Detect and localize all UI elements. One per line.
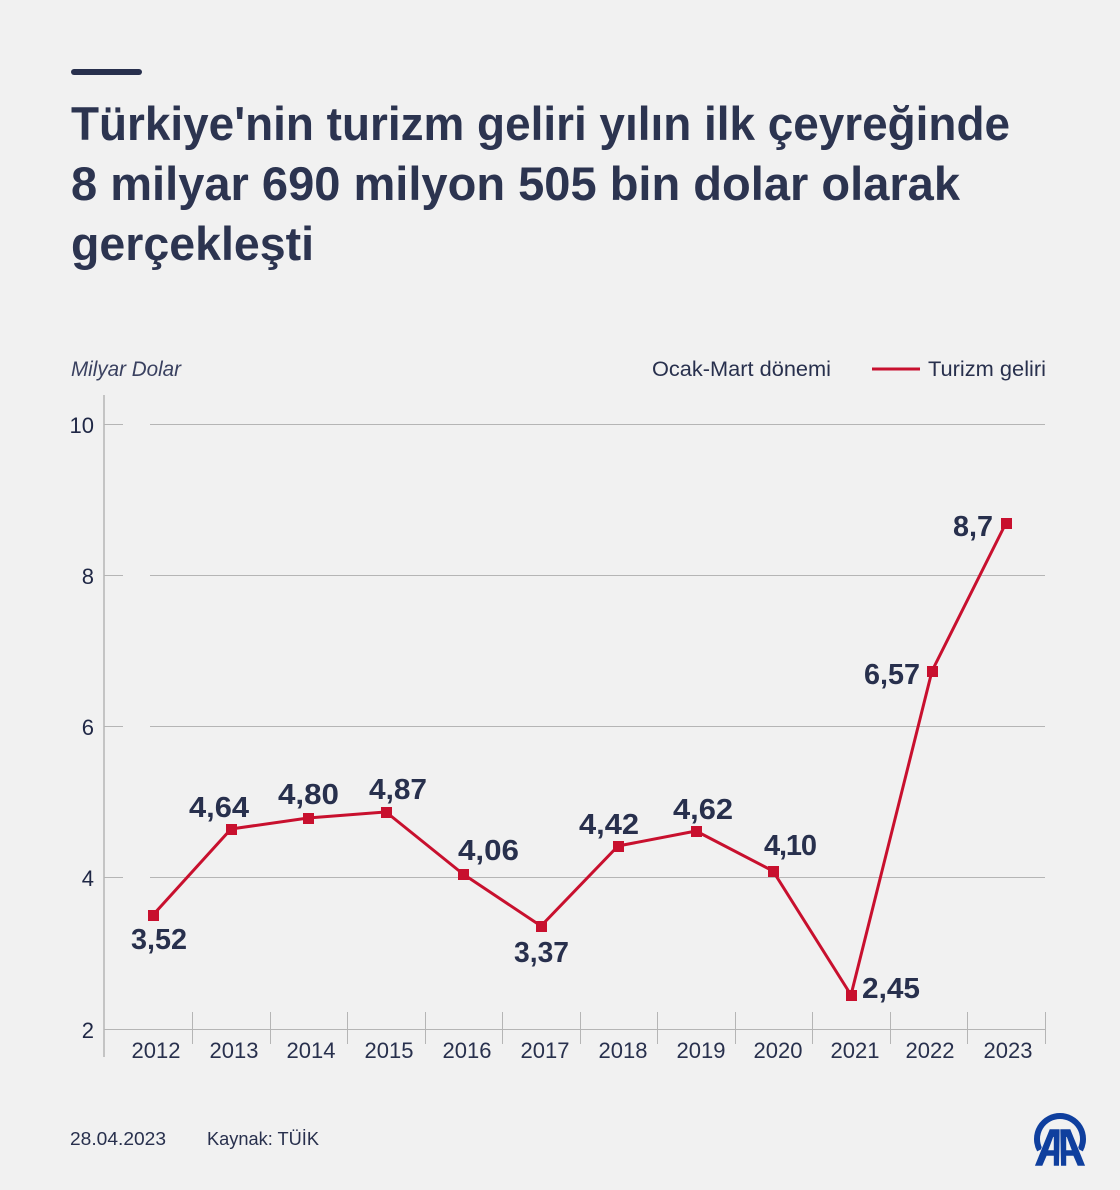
x axis labels: 2012 [132,1038,180,1063]
y axis labels: 4 [82,866,94,891]
x axis labels: 2017 [521,1038,569,1063]
data labels: 3,52 [131,924,187,956]
data labels: 6,57 [864,659,920,691]
title: Türkiye'nin turizm geliri yılın ilk çeyreğinde [71,97,1010,150]
data labels: 4,42 [579,809,639,841]
x axis labels: 2022 [906,1038,954,1063]
y axis labels: 6 [82,715,94,740]
icon: AA logo [1034,1116,1086,1166]
y axis labels [70,413,94,1043]
title: gerçekleşti [71,217,314,270]
x axis labels: 2021 [831,1038,879,1063]
data labels: 8,7 [953,511,993,543]
data labels [131,511,993,1005]
accent bar [71,69,142,75]
x axis labels: 2018 [599,1038,647,1063]
y axis labels: 8 [82,564,94,589]
data labels: 4,06 [458,835,519,867]
data labels: 4,62 [673,794,733,826]
period label: Ocak-Mart dönemi [652,358,831,381]
legend: Turizm geliri [928,358,1046,381]
data labels: 2,45 [862,973,920,1005]
chart axes and grid [104,395,1046,1057]
data labels: 4,10 [764,830,817,862]
x axis labels: 2019 [677,1038,725,1063]
date: 28.04.2023 [70,1129,166,1149]
line series: tourism revenue [148,518,1012,1001]
y axis labels: 2 [82,1018,94,1043]
title [71,97,1010,270]
data labels: 3,37 [514,937,569,969]
unit label: Milyar Dolar [71,358,182,381]
x axis labels: 2015 [365,1038,413,1063]
x axis labels: 2014 [287,1038,335,1063]
x axis labels: 2016 [443,1038,491,1063]
x axis labels: 2023 [984,1038,1032,1063]
x axis labels [132,1038,1032,1063]
title: 8 milyar 690 milyon 505 bin dolar olarak [71,157,961,210]
x axis labels: 2013 [210,1038,258,1063]
data labels: 4,80 [278,779,339,811]
x axis labels: 2020 [754,1038,802,1063]
data labels: 4,64 [189,792,249,824]
source: Kaynak: TÜİK [207,1129,319,1149]
data labels: 4,87 [369,774,427,806]
y axis labels: 10 [70,413,94,438]
